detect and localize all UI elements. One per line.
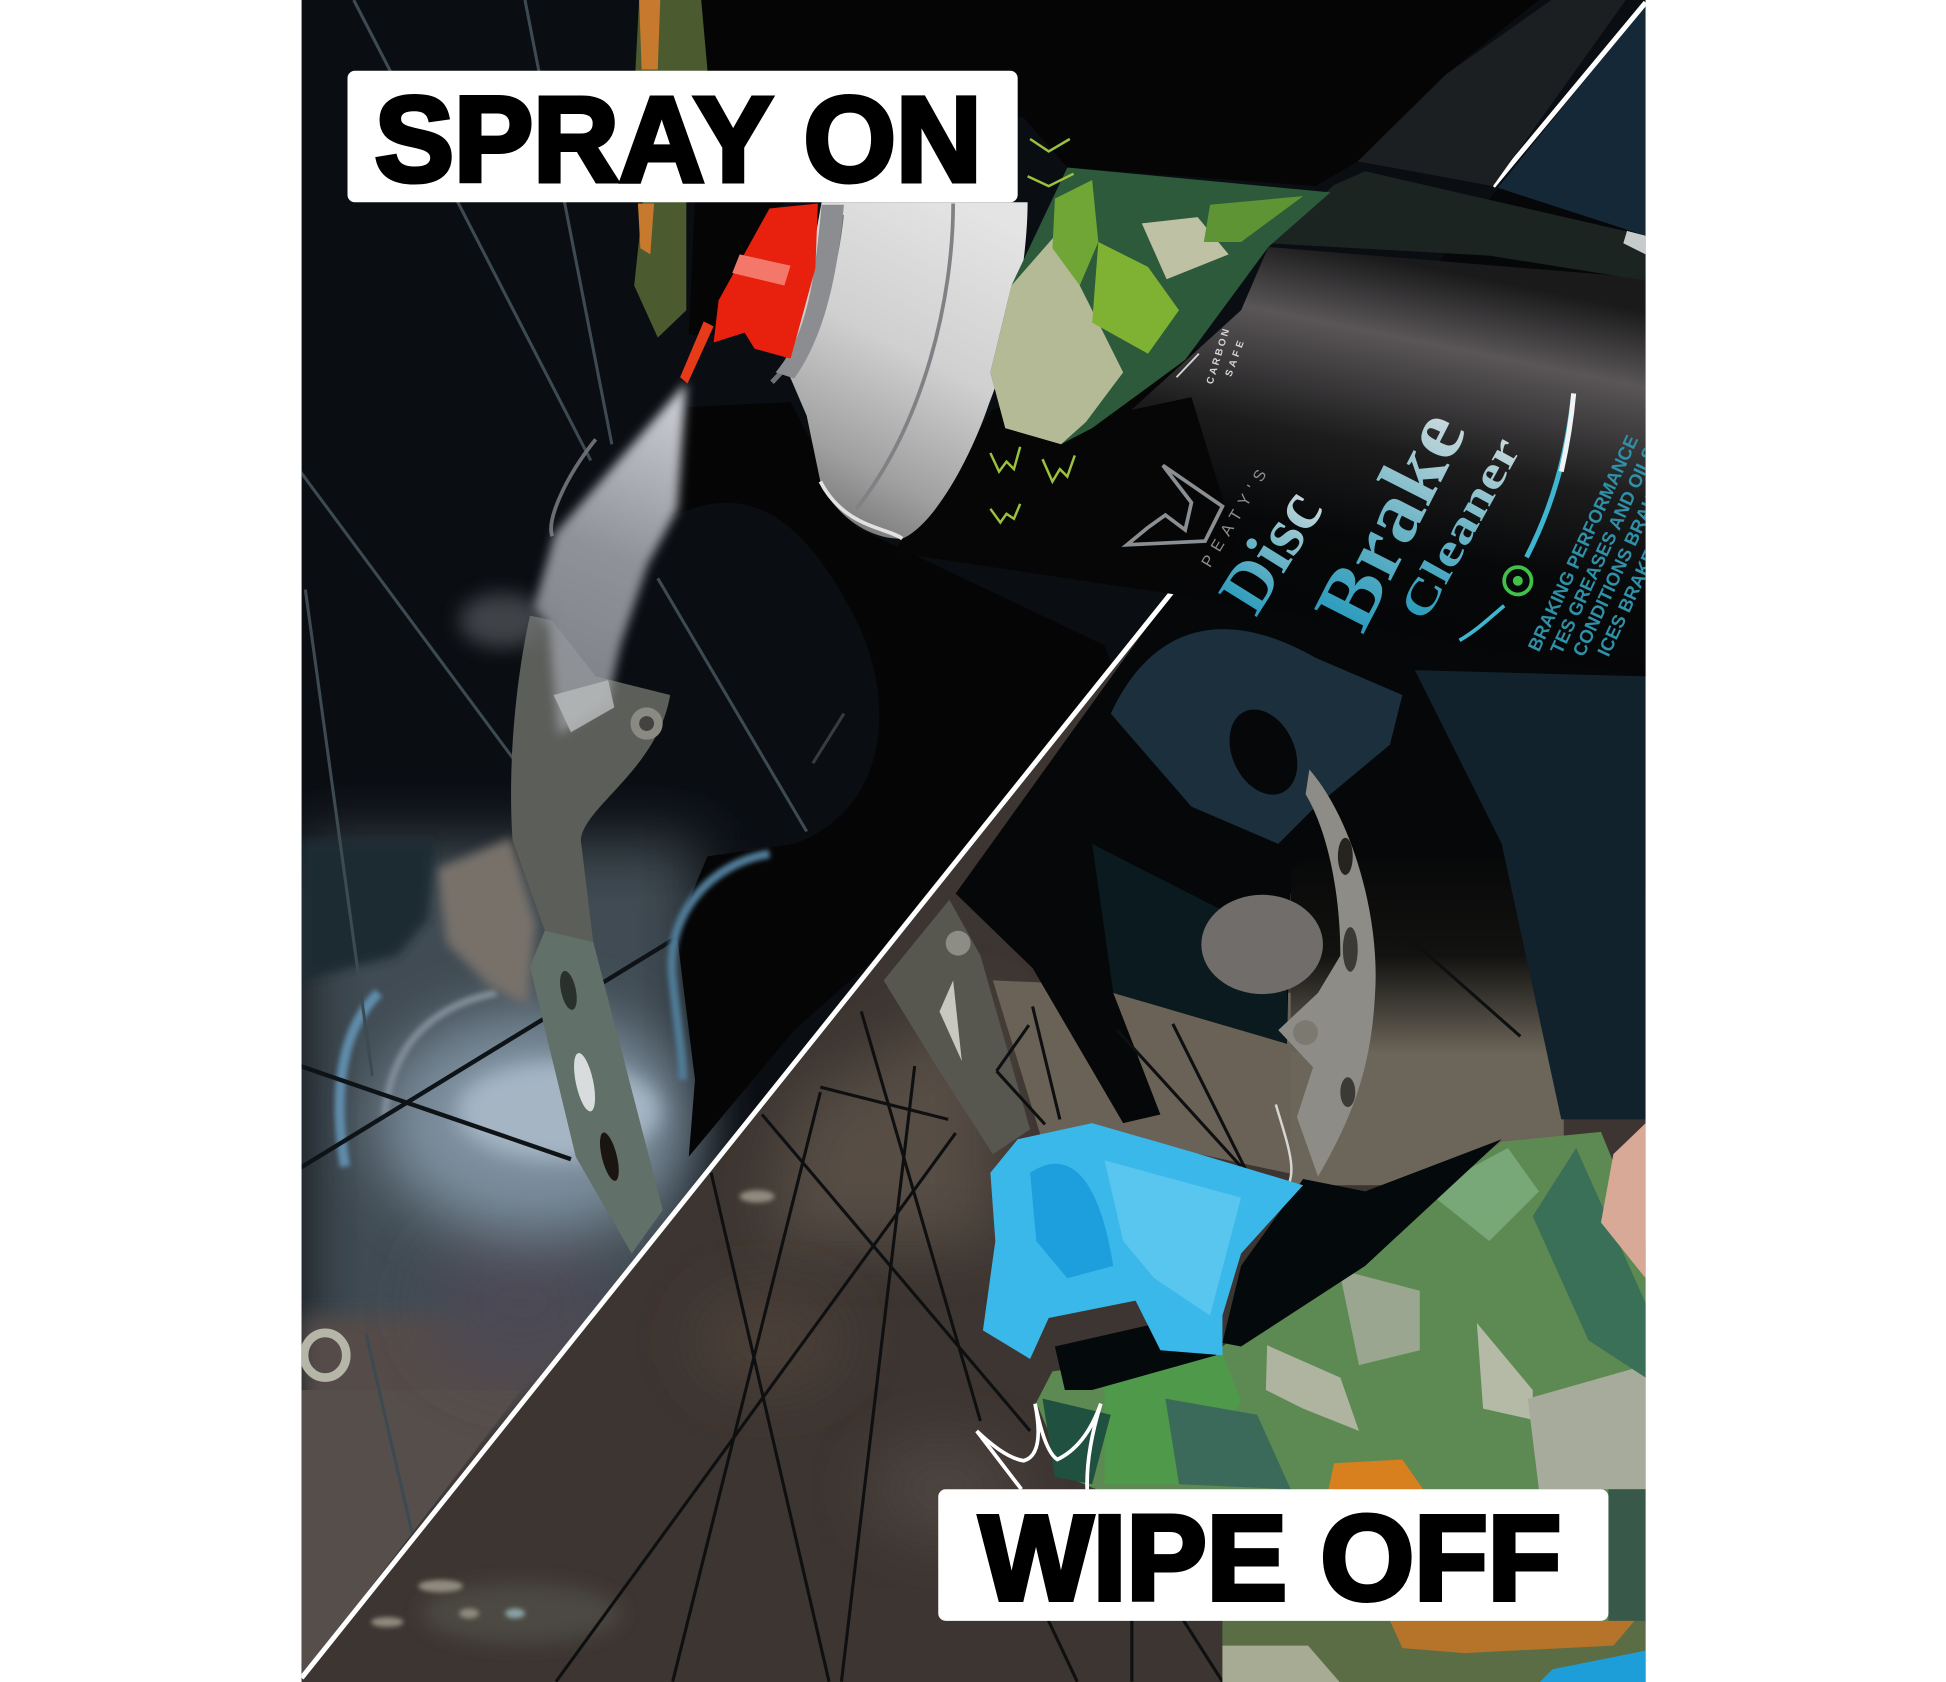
panel: spray on scene, upper left of the diagonal — [302, 0, 1112, 1674]
black glove cuff — [1222, 1139, 1502, 1347]
can small print: BRAKING PERFORMANCE — [1524, 432, 1642, 654]
icon: Peaty's crown outline — [977, 1404, 1101, 1489]
rotor, sprayed side — [511, 616, 670, 1253]
label: wipe off: WIPE OFF — [979, 1491, 1561, 1626]
fork leg and hub — [956, 605, 1290, 1124]
aerosol can — [680, 139, 1672, 676]
blue microfibre cloth — [983, 1123, 1303, 1359]
diagonal divider line, lower segment — [302, 590, 1174, 1678]
rotor, wiped side — [1278, 769, 1376, 1177]
red nozzle — [680, 204, 818, 383]
spokes — [556, 943, 1520, 1682]
panel: wipe off scene, lower right of the diagonal — [302, 0, 1646, 1682]
Peaty's logo on can — [1127, 463, 1272, 570]
can body — [1105, 247, 1646, 676]
Peaty's logo on can: PEATY'S — [1198, 463, 1272, 570]
carbon safe mark — [1177, 328, 1247, 386]
can swoosh and dot — [1459, 393, 1574, 640]
skin at wrist — [1601, 1123, 1646, 1278]
knurled sleeve — [1268, 171, 1646, 280]
crown pattern on black band — [990, 139, 1075, 522]
spray jet — [534, 382, 686, 735]
can product name: Disc — [1204, 476, 1338, 627]
can small print: CONDITIONS BRAKES — [1568, 469, 1672, 659]
caliper and fork — [664, 402, 1142, 1157]
light gravel spots — [371, 1190, 774, 1627]
silver can shoulder — [772, 202, 1028, 539]
carbon safe mark: SAFE — [1224, 339, 1247, 378]
carbon safe mark: CARBON — [1205, 328, 1232, 386]
can product name: Brake — [1297, 396, 1484, 644]
black band under the can — [898, 348, 1200, 594]
photo: full bleed image area — [300, 0, 1672, 1682]
can small print: ICES BRAKES — [1593, 535, 1666, 659]
infographic: disc brake cleaning photo panel — [302, 0, 1646, 1682]
black upper glove — [670, 0, 1539, 335]
hub — [379, 1011, 689, 1235]
can product name: Cleaner — [1390, 429, 1530, 628]
glove fingers behind label — [634, 0, 707, 338]
ground behind the fork — [993, 980, 1291, 1174]
label: spray on: SPRAY ON — [375, 72, 982, 207]
ground patch — [437, 838, 536, 1005]
camo glove holding can — [990, 168, 1330, 444]
camo glove on the wiping hand — [1036, 1132, 1646, 1682]
can product name — [1204, 396, 1530, 644]
can small print: TES GREASES AND OILS — [1546, 443, 1660, 657]
diagonal divider line, upper segment — [1493, 2, 1646, 186]
sky strip right of the line — [1493, 0, 1646, 236]
